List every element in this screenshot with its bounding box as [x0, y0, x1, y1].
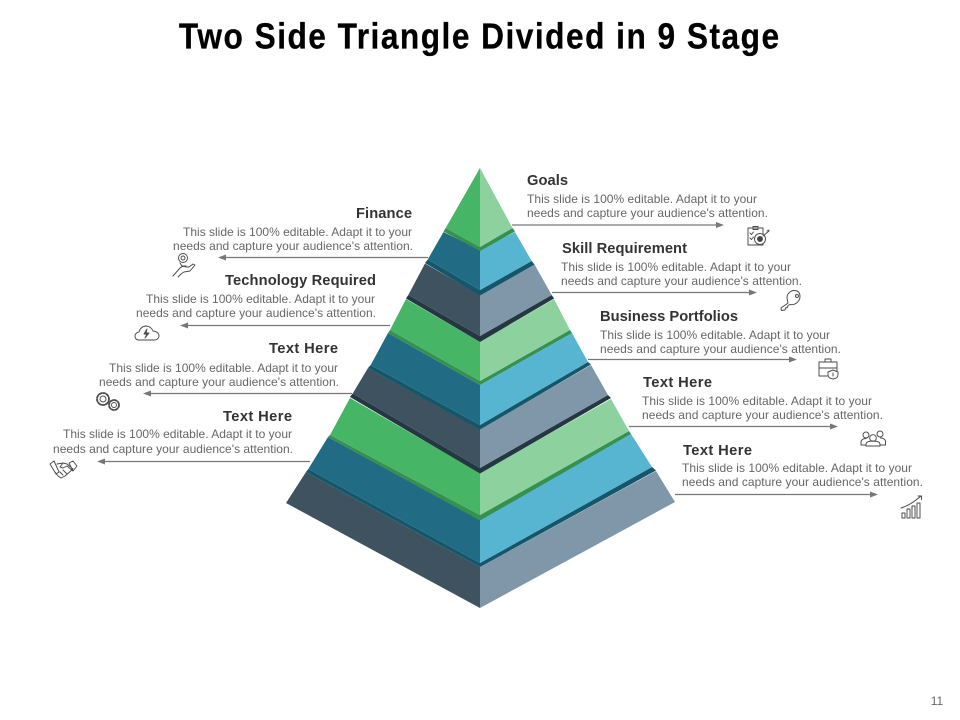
callout: Goals: Goals: [527, 173, 568, 189]
callout: Business Portfolios: [600, 309, 841, 356]
callout: Text Here (right 4): needs and capture your audience's attention.: [642, 408, 883, 422]
stage 2 teal band: [428, 232, 532, 290]
callout: Finance: Finance: [356, 206, 412, 222]
callout: Text Here (right 5): [682, 443, 923, 489]
callout: Business Portfolios: This slide is 100% editable. Adapt it to your: [600, 328, 830, 342]
stage 4 green band: [390, 299, 570, 381]
callout: Skill Requirement: [561, 241, 802, 288]
callout: Business Portfolios: needs and capture your audience's attention.: [600, 342, 841, 356]
icon: people group: [861, 431, 886, 446]
stage 6 slate band: [353, 365, 608, 468]
callout: Goals: needs and capture your audience's attention.: [527, 206, 768, 220]
arrow: Finance: [218, 254, 428, 260]
callout: Text Here (right 5): needs and capture your audience's attention.: [682, 475, 923, 489]
callout: Text Here (right 5): This slide is 100% editable. Adapt it to your: [682, 461, 912, 475]
pyramid: [286, 168, 675, 608]
callout: Goals: [527, 173, 768, 220]
arrow: Text Here (right 4): [629, 424, 838, 430]
stage 1 green apex: [446, 168, 512, 247]
callout: Text Here (left 4): This slide is 100% editable. Adapt it to your: [63, 427, 292, 441]
icon: cloud bolt: [135, 326, 159, 340]
stage 7 green band: [330, 398, 629, 515]
icon: hand holding coin: [173, 254, 195, 277]
icon: growth chart: [901, 496, 922, 518]
callout: Finance: This slide is 100% editable. Adapt it to your: [183, 225, 412, 239]
callout: Text Here (left 3): [99, 341, 339, 389]
callout: Business Portfolios: Business Portfolios: [600, 309, 738, 325]
arrow: Goals: [512, 222, 724, 228]
arrow: Skill Requirement: [552, 290, 757, 296]
callout: Text Here (left 3): This slide is 100% editable. Adapt it to your: [109, 361, 338, 375]
callout: Skill Requirement: needs and capture your audience's attention.: [561, 274, 802, 288]
callout: Finance: needs and capture your audience's attention.: [173, 239, 413, 253]
arrow: Text Here (right 5): [675, 492, 878, 498]
callout: Text Here (left 3): Text Here: [269, 341, 338, 357]
callout: Text Here (left 4): Text Here: [223, 409, 292, 425]
stage 3 slate band: [408, 264, 552, 336]
page number: 11: [931, 694, 944, 708]
icon: key: [781, 290, 800, 310]
icon: gears: [97, 393, 119, 410]
arrow: Business Portfolios: [588, 356, 797, 362]
callout: Finance: [173, 206, 413, 253]
callout: Text Here (right 5): Text Here: [683, 443, 752, 459]
callout: Text Here (left 4): [53, 409, 293, 456]
callout: Technology Required: This slide is 100% editable. Adapt it to your: [146, 292, 375, 306]
callout: Technology Required: needs and capture your audience's attention.: [136, 306, 376, 320]
stage 5 teal band: [371, 333, 588, 425]
stage 8 teal band: [308, 434, 652, 563]
callout: Skill Requirement: This slide is 100% editable. Adapt it to your: [561, 260, 791, 274]
title: Two Side Triangle Divided in 9 Stage: [179, 17, 779, 57]
callout: Text Here (left 4): needs and capture your audience's attention.: [53, 442, 293, 456]
arrow: Technology Required: [180, 322, 390, 328]
callout: Text Here (right 4): [642, 375, 883, 422]
callout: Text Here (right 4): This slide is 100% editable. Adapt it to your: [642, 394, 872, 408]
icon: briefcase shield: [819, 359, 838, 379]
stage 9 slate band: [286, 471, 675, 608]
icon: handshake: [50, 461, 77, 478]
callout: Goals: This slide is 100% editable. Adapt it to your: [527, 192, 757, 206]
arrow: Text Here (left 3): [143, 390, 352, 396]
callout: Text Here (right 4): Text Here: [643, 375, 712, 391]
callout: Skill Requirement: Skill Requirement: [562, 241, 687, 257]
arrow: Text Here (left 4): [97, 458, 310, 464]
callout: Technology Required: [136, 273, 376, 320]
callout: Technology Required: Technology Required: [225, 273, 376, 289]
callout: Text Here (left 3): needs and capture your audience's attention.: [99, 375, 339, 389]
icon: clipboard target: [748, 226, 769, 245]
